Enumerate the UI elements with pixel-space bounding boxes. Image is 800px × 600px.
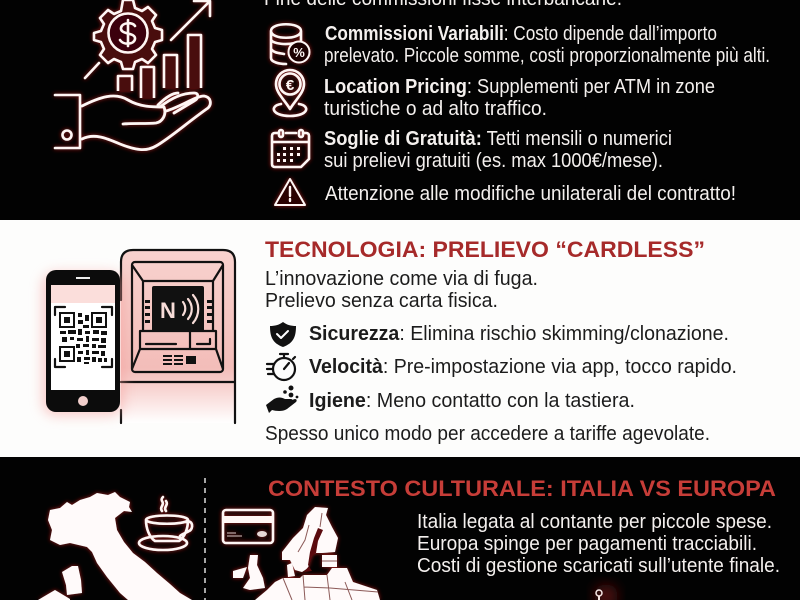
icon: credit card bbox=[223, 510, 273, 543]
icon: euro location pin bbox=[274, 70, 306, 116]
icon: hand with drops bbox=[266, 386, 298, 413]
text: closing note: Spesso unico modo per accedere a tariffe agevolate. bbox=[265, 423, 710, 445]
icon: stopwatch bbox=[267, 354, 295, 380]
icon: euro location pin: € bbox=[286, 77, 295, 94]
text: velocità: Velocità: Pre-impostazione via app, tocco rapido. bbox=[309, 356, 737, 378]
map: Italy bbox=[38, 492, 192, 600]
icon: warning triangle bbox=[275, 179, 305, 205]
map: Europe bbox=[233, 507, 380, 600]
panel: top dark section bbox=[0, 0, 800, 220]
heading: tecnologia: TECNOLOGIA: PRELIEVO “CARDLESS” bbox=[265, 237, 705, 262]
text: cultural comparison bbox=[417, 511, 780, 577]
text: cultural comparison: Costi di gestione scaricati sull’utente finale. bbox=[417, 555, 780, 577]
icon: shield bbox=[270, 322, 296, 347]
text: soglie di gratuità: Soglie di Gratuità: Tetti mensili o numerici bbox=[324, 128, 672, 150]
item: location pricing bbox=[274, 70, 715, 120]
text: location pricing bbox=[324, 76, 715, 120]
item: commissioni variabili bbox=[271, 23, 770, 67]
panel: cardless technology white band bbox=[0, 220, 800, 457]
panel: cultural context dark section bbox=[0, 457, 800, 600]
item: soglie di gratuità bbox=[272, 128, 672, 172]
text: location pricing: turistiche o ad alto traffico. bbox=[324, 98, 547, 120]
icon: coffee cup bbox=[139, 497, 192, 550]
icon: calendar bbox=[272, 130, 309, 167]
text: soglie di gratuità bbox=[324, 128, 672, 172]
heading: contesto culturale: CONTESTO CULTURALE: ITALIA VS EUROPA bbox=[268, 476, 776, 501]
text: warning: Attenzione alle modifiche unilaterali del contratto! bbox=[325, 183, 736, 205]
text: igiene: Igiene: Meno contatto con la tastiera. bbox=[309, 390, 635, 412]
text: commissioni variabili: Commissioni Variabili: Costo dipende dall’importo bbox=[325, 23, 717, 45]
text: commissioni variabili bbox=[324, 23, 770, 67]
icon: smartphone with QR code bbox=[42, 270, 124, 416]
text: innovation intro: Prelievo senza carta fisica. bbox=[265, 290, 498, 312]
icon: ATM machine with NFC bbox=[121, 250, 235, 423]
text: innovation intro: L’innovazione come via di fuga. bbox=[265, 268, 538, 290]
text: soglie di gratuità: sui prelievi gratuiti (es. max 1000€/mese). bbox=[324, 150, 663, 172]
text: sicurezza: Sicurezza: Elimina rischio skimming/clonazione. bbox=[309, 323, 729, 345]
QR code bbox=[55, 307, 112, 367]
icon: coins with percent: % bbox=[293, 45, 305, 60]
text: location pricing: Location Pricing: Supplementi per ATM in zone bbox=[324, 76, 715, 98]
text: innovation intro bbox=[265, 268, 538, 312]
icon: ATM machine with NFC: N bbox=[160, 298, 176, 323]
item: warning bbox=[275, 179, 736, 205]
text: cultural comparison: Italia legata al contante per piccole spese. bbox=[417, 511, 772, 533]
icon: coins with percent bbox=[271, 24, 310, 64]
icon: cut-off marker at bottom edge bbox=[594, 584, 618, 600]
icon: hand holding gear and rising chart bbox=[55, 0, 210, 150]
text: cultural comparison: Europa spinge per pagamenti tracciabili. bbox=[417, 533, 757, 555]
divider: dashed bbox=[204, 478, 206, 600]
